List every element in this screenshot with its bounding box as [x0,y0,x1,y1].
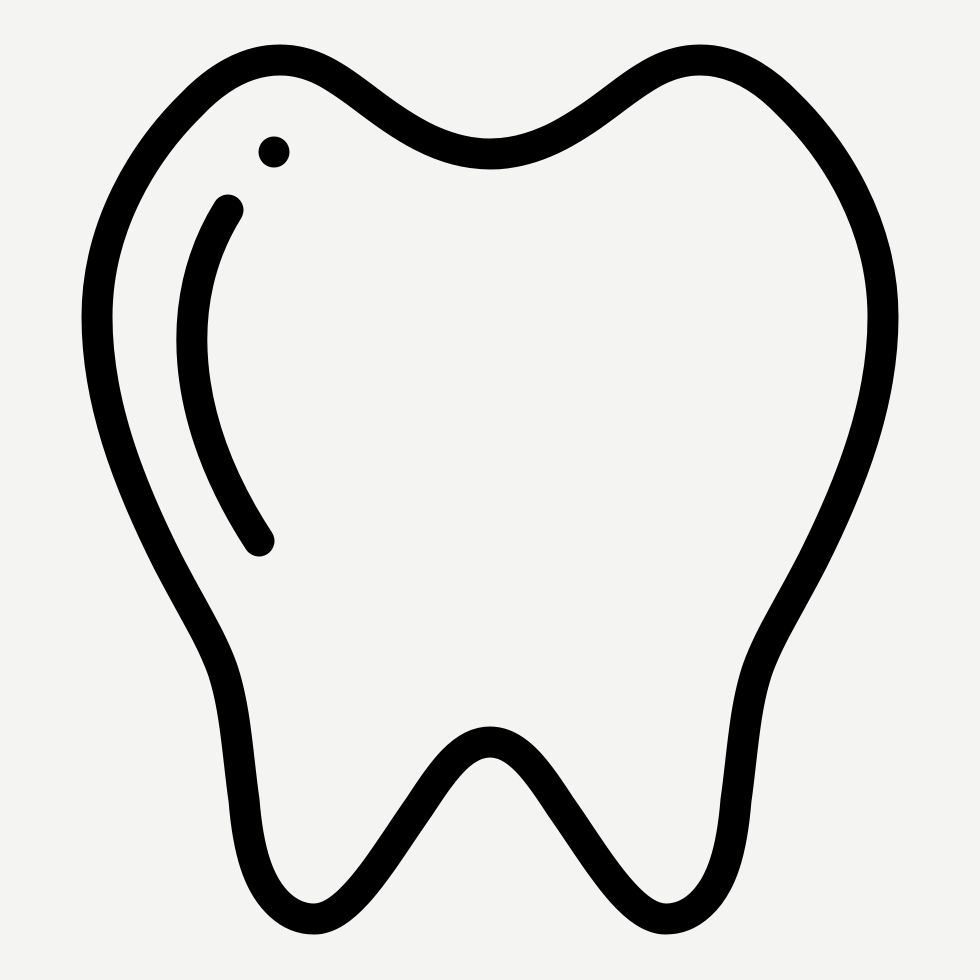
highlight dot [258,136,290,168]
highlight arc [192,210,259,541]
tooth outline [97,60,883,919]
